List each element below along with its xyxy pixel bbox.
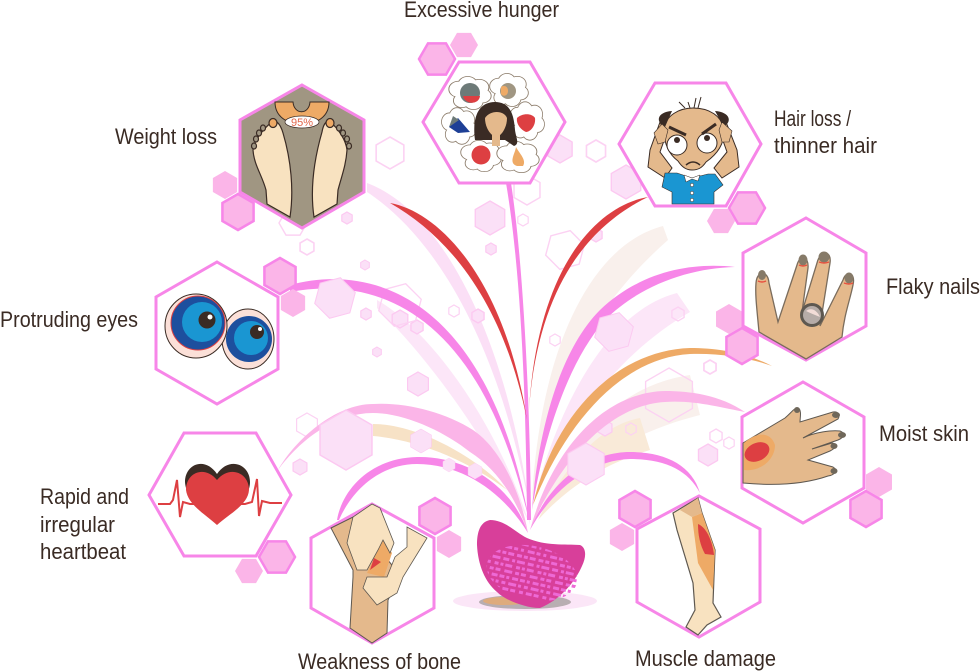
heading: heartbeat: heartbeat bbox=[40, 539, 126, 564]
heading: thinner hair: thinner hair bbox=[774, 133, 877, 158]
icon: hand with flaky nails bbox=[743, 218, 866, 360]
heading: irregular: irregular bbox=[40, 512, 115, 537]
icon: weight scale and feet bbox=[240, 85, 364, 228]
accent hexagons on arcs bbox=[312, 273, 636, 485]
icon: weight scale and feet: 95% bbox=[291, 117, 313, 129]
arc: rapid heartbeat bbox=[278, 404, 528, 533]
arc: protruding eyes bbox=[290, 279, 530, 525]
pale floating hexagons bbox=[293, 135, 718, 475]
background: pale swooshes bbox=[367, 183, 700, 520]
arc: muscle damage bbox=[530, 452, 700, 530]
icon: thyroid gland bbox=[453, 520, 597, 611]
heading: protruding eyes: Protruding eyes bbox=[0, 307, 138, 332]
heading: weight loss: Weight loss bbox=[115, 124, 217, 149]
arc: orange bbox=[533, 348, 772, 505]
heading: rapid and: Rapid and bbox=[40, 484, 129, 509]
arc: weakness of bone bbox=[337, 457, 528, 533]
outlined floating hexagons bbox=[276, 137, 734, 449]
arc: flaky nails bbox=[532, 266, 735, 510]
icon: leg with muscle damage bbox=[637, 496, 760, 637]
heading: moist skin: Moist skin bbox=[879, 421, 969, 446]
small pink hexagon clusters bbox=[213, 33, 892, 583]
icon: heart with ECG bbox=[149, 433, 291, 556]
icon: balding man bbox=[619, 83, 761, 206]
arc: weight loss red bbox=[390, 203, 527, 420]
icon: knee held by hands bbox=[311, 504, 434, 643]
heading: muscle damage: Muscle damage bbox=[635, 646, 776, 671]
icon: hand with moist skin bbox=[741, 382, 864, 523]
arc: hair loss red bbox=[529, 197, 648, 410]
arc: moist skin bbox=[530, 391, 745, 530]
icon: bulging eyes bbox=[156, 262, 278, 404]
heading: hair loss: Hair loss / bbox=[774, 106, 852, 131]
arc: food to gland bbox=[506, 183, 531, 520]
icon: food thoughts bbox=[423, 62, 565, 183]
